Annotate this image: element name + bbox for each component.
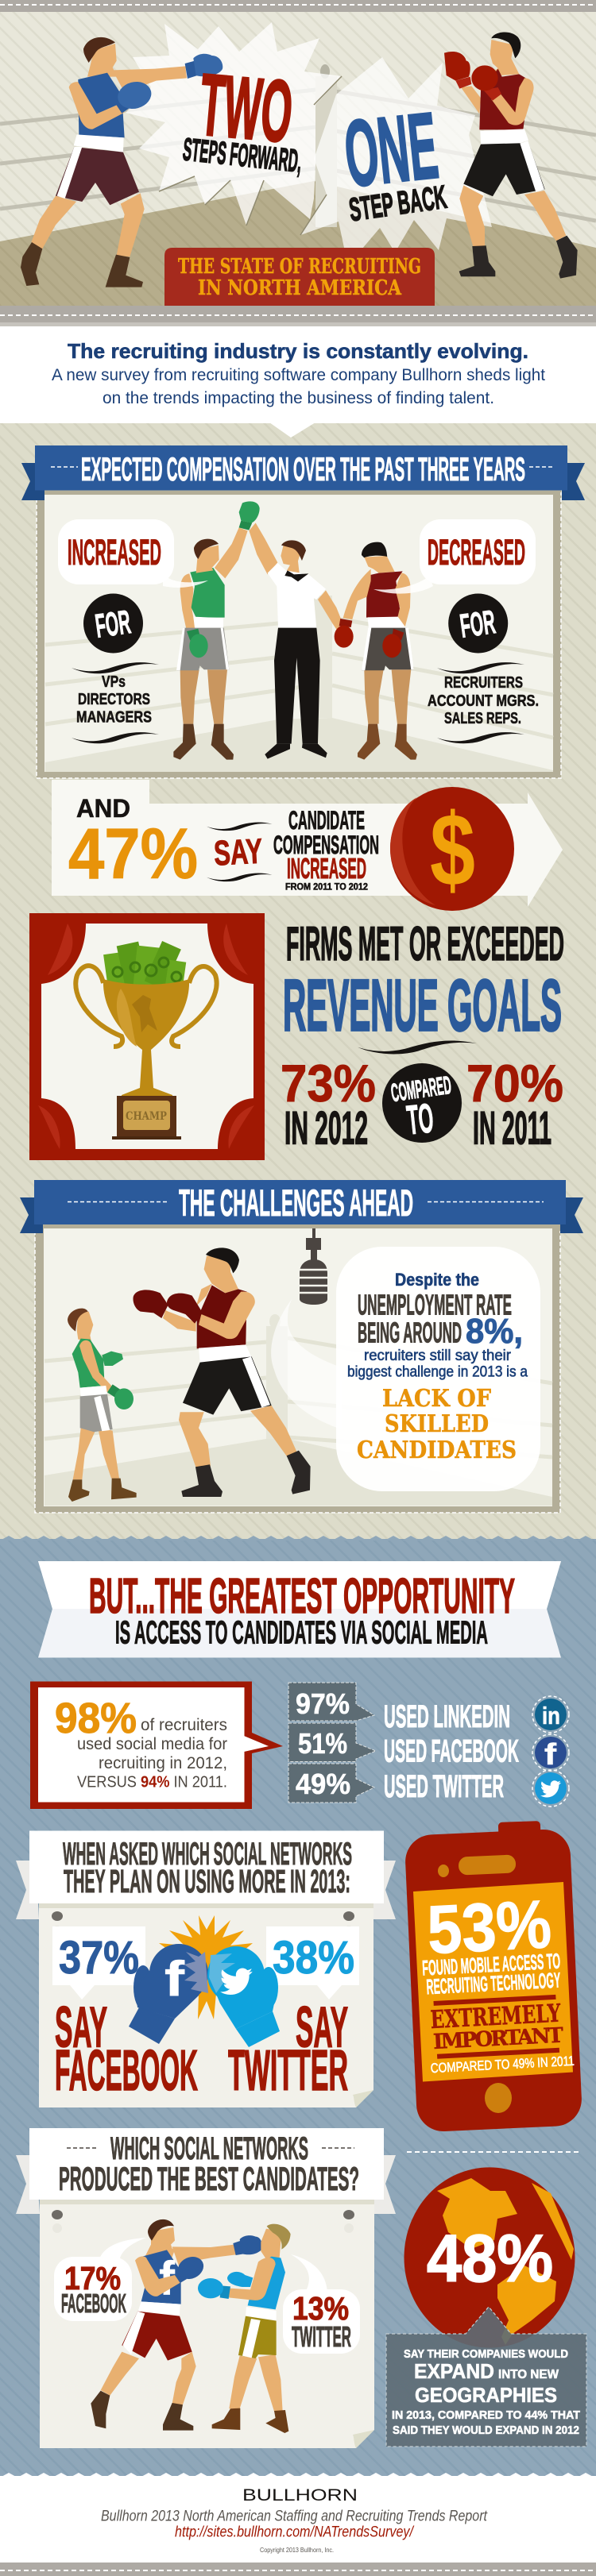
revenue goals text: 70% — [466, 1054, 563, 1113]
list: decreased roles — [428, 674, 539, 727]
speech bubble: unemployment: recruiters still say their — [364, 1348, 512, 1364]
icon: facebook — [532, 1734, 569, 1772]
speech bubble: unemployment: CANDIDATES — [357, 1436, 517, 1464]
pins — [52, 1911, 354, 1935]
headline: STEP BACK: STEP BACK — [347, 179, 449, 228]
bubble: 38 percent: 38% — [273, 1932, 354, 1984]
burst creases — [159, 76, 342, 235]
money — [103, 941, 186, 990]
figure: small boxer — [68, 1309, 137, 1502]
footer zigzag — [0, 2473, 596, 2478]
poster: best candidates: WHICH SOCIAL NETWORKS — [110, 2131, 308, 2166]
icon: dollar coin: $ — [430, 792, 475, 908]
bubble: 13 percent twitter — [283, 2254, 360, 2354]
callout: 98 percent: VERSUS 94% IN 2011. — [77, 1774, 227, 1791]
trophy cup — [75, 966, 217, 1140]
panel: expansion: EXPAND — [414, 2359, 494, 2383]
callout: 98 percent: used social media for — [77, 1735, 227, 1753]
icon: twitter — [532, 1770, 569, 1807]
compared to badge — [382, 1063, 462, 1143]
bubble: increased — [58, 519, 174, 584]
callout: 47 percent arrow: FROM 2011 TO 2012 — [285, 881, 368, 893]
hero scene — [0, 12, 596, 306]
callout: 47 percent arrow: SAY — [213, 831, 263, 873]
poster: best candidates — [16, 2128, 396, 2448]
panel: expansion: SAID THEY WOULD EXPAND IN 2012 — [393, 2424, 579, 2437]
bubble: 37 percent: 37% — [59, 1932, 139, 1984]
burst — [159, 1915, 253, 2019]
figure: facebook boxer: f — [159, 2252, 176, 2305]
FOR badge left: FOR — [93, 603, 133, 645]
footer: Copyright 2013 Bullhorn, Inc. — [260, 2547, 334, 2554]
figure: facebook boxer — [91, 2219, 262, 2431]
intro block: The recruiting industry is constantly evolving. — [68, 339, 528, 363]
FOR badge right — [448, 594, 508, 653]
stat: linkedin: 97% — [296, 1687, 350, 1720]
boxer: blue left — [21, 37, 223, 287]
figure: defeated boxer — [343, 542, 417, 760]
globe 48 percent: 48% — [427, 2221, 553, 2296]
callout: 47 percent arrow: AND — [76, 794, 130, 823]
figure: big boxer — [133, 1248, 311, 1497]
panel: trophy — [29, 913, 265, 1160]
speech bubble: unemployment — [271, 1247, 540, 1491]
bubble: 17 percent facebook: FACEBOOK — [61, 2289, 126, 2318]
FOR badge right: FOR — [458, 603, 497, 645]
stat: twitter: 49% — [296, 1768, 350, 1800]
figure: referee — [249, 523, 354, 759]
globe 48 percent — [404, 2167, 575, 2348]
list: decreased roles: SALES REPS. — [444, 710, 521, 727]
icon: microphone — [300, 1228, 327, 1305]
callout: 98 percent — [30, 1682, 283, 1809]
callout: 47 percent arrow: INCREASED — [287, 852, 366, 885]
speech bubble: unemployment: BEING AROUND — [358, 1317, 462, 1348]
list: increased roles: DIRECTORS — [78, 691, 150, 708]
icon: facebook glove — [129, 1944, 208, 2044]
bubble: increased: INCREASED — [68, 532, 161, 573]
footer: http://sites.bullhorn.com/NATrendsSurvey/ — [175, 2524, 414, 2541]
burst right — [300, 57, 492, 254]
speech bubble: unemployment: SKILLED — [385, 1410, 489, 1438]
bottom stitched band — [0, 2563, 596, 2576]
figure: twitter boxer — [198, 2224, 291, 2433]
intro block: on the trends impacting the business of finding talent. — [103, 389, 494, 407]
list: increased roles: VPs — [102, 673, 126, 691]
stat: linkedin — [288, 1683, 510, 1734]
list: decreased roles: ACCOUNT MGRS. — [428, 692, 539, 710]
callout: 47 percent arrow: COMPENSATION — [273, 831, 379, 859]
swooshes — [72, 662, 524, 743]
stat: facebook: 51% — [298, 1727, 347, 1760]
callout: 98 percent: of recruiters — [141, 1716, 227, 1734]
bubble: 38 percent — [266, 1926, 359, 1999]
poster: networks in 2013: FACEBOOK — [55, 2039, 198, 2103]
page background: footer white — [0, 2476, 596, 2563]
intro block — [0, 326, 596, 438]
subtitle plaque — [164, 248, 435, 306]
bubble: 17 percent facebook: 17% — [64, 2260, 121, 2296]
footer: Bullhorn 2013 North American Staffing and Recruiting Trends Report — [101, 2508, 488, 2525]
icon: facebook glove: f — [164, 1952, 184, 2007]
icon: dollar coin — [390, 787, 514, 911]
icon: linkedin: in — [542, 1702, 560, 1730]
bubble: decreased — [420, 519, 536, 584]
poster: networks in 2013 — [16, 1831, 396, 2107]
bubble: 37 percent — [52, 1926, 145, 1999]
say facebook — [55, 1996, 198, 2103]
bubble: 13 percent twitter: 13% — [292, 2290, 349, 2327]
revenue goals text — [281, 917, 564, 1155]
page background: blue — [0, 1539, 596, 2476]
panel: expansion: GEOGRAPHIES — [415, 2383, 557, 2407]
phone: mobile access — [404, 1821, 582, 2133]
speech bubble: unemployment: biggest challenge in 2013 is a — [347, 1364, 528, 1380]
revenue goals text: COMPARED — [389, 1070, 453, 1107]
hero scene: STEPS FORWARD, — [181, 132, 304, 179]
poster: networks in 2013: TWITTER — [228, 2039, 348, 2103]
callout: 47 percent arrow: 47% — [68, 815, 198, 894]
pins — [52, 2210, 354, 2233]
icon: twitter glove — [207, 1946, 280, 2047]
compared to badge: TO — [404, 1095, 435, 1143]
ribbon: greatest opportunity — [38, 1561, 561, 1658]
revenue goals text: IN 2012 — [284, 1102, 368, 1155]
top stitched band — [0, 0, 596, 12]
revenue goals text: 73% — [281, 1054, 376, 1113]
panel: challenges — [35, 1223, 560, 1513]
panel: expansion: INTO NEW — [498, 2368, 559, 2381]
subtitle plaque: THE STATE OF RECRUITING — [178, 255, 421, 279]
hero scene: TWO — [196, 56, 296, 161]
bubble: 17 percent facebook — [54, 2238, 146, 2321]
subtitle plaque: IN NORTH AMERICA — [198, 276, 402, 300]
footer — [101, 2486, 488, 2554]
icon: linkedin — [532, 1696, 569, 1733]
panel: expansion: SAY THEIR COMPANIES WOULD — [404, 2347, 568, 2361]
list: increased roles — [76, 673, 152, 726]
stat: twitter — [288, 1764, 504, 1804]
trophy cup: CHAMP — [126, 1110, 167, 1123]
banner: expected compensation — [21, 445, 585, 500]
panel: expansion — [386, 2307, 586, 2447]
callout: 98 percent: recruiting in 2012, — [99, 1754, 227, 1772]
stitches above globe — [407, 2151, 579, 2153]
poster: networks in 2013: SAY — [296, 1996, 348, 2060]
bubble tails — [163, 573, 433, 594]
list: decreased roles: RECRUITERS — [444, 674, 523, 692]
FOR badge left — [83, 594, 143, 653]
callout: 98 percent: 98% — [55, 1695, 137, 1742]
panel: expected compensation — [37, 490, 561, 778]
intro block: A new survey from recruiting software company Bullhorn sheds light — [52, 366, 545, 384]
list: increased roles: MANAGERS — [76, 708, 152, 726]
burst left — [126, 22, 342, 226]
page background: tan — [0, 423, 596, 1539]
speech bubble: unemployment: Despite the — [395, 1270, 479, 1290]
say facebook: SAY — [55, 1996, 107, 2060]
lower stitched band — [0, 306, 596, 326]
panel: expansion: IN 2013, COMPARED TO 44% THAT — [392, 2408, 580, 2422]
callout: 47 percent arrow: CANDIDATE — [288, 806, 365, 835]
bubble: 13 percent twitter: TWITTER — [292, 2320, 351, 2353]
say twitter — [228, 1996, 348, 2103]
speech bubble: unemployment: LACK OF — [382, 1385, 491, 1413]
footer: BULLHORN — [242, 2486, 358, 2505]
phone: mobile access: IMPORTANT — [432, 2023, 564, 2054]
icon: facebook: f — [544, 1738, 556, 1772]
boxer: red right — [444, 32, 578, 279]
phone: mobile access: 53% — [425, 1886, 553, 1969]
stat: facebook — [288, 1723, 519, 1769]
banner: challenges ahead — [20, 1180, 583, 1233]
hero scene: ONE — [340, 93, 443, 207]
figure: winner boxer — [173, 501, 260, 760]
speech bubble: unemployment: 8%, — [466, 1312, 523, 1351]
blue zigzag — [0, 1536, 596, 1541]
callout: 47 percent arrow — [52, 780, 563, 907]
